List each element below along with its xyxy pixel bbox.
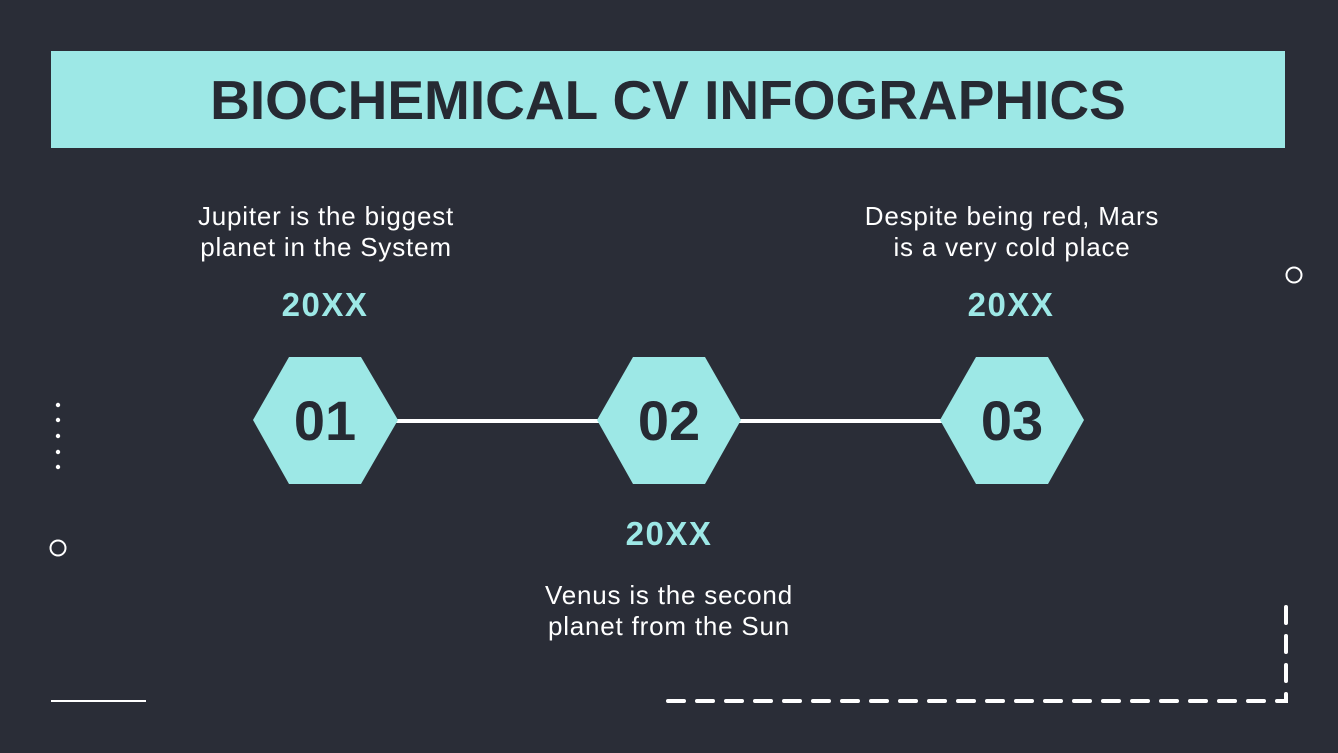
hexagon 01 <box>253 357 398 484</box>
decor: line <box>51 700 146 702</box>
title bar <box>51 51 1285 148</box>
year: step 3: 20XX <box>968 286 1054 323</box>
year: step 1: 20XX <box>282 286 368 323</box>
hexagon 03 <box>940 357 1084 484</box>
decor: circles <box>50 268 1302 556</box>
text: step 2: Venus is the second <box>545 580 793 610</box>
hexagon 02: 02 <box>638 389 700 452</box>
text: step 3: Despite being red, Mars <box>865 201 1159 231</box>
text: step 1: planet in the System <box>200 232 452 262</box>
text: step 1: Jupiter is the biggest <box>198 201 454 231</box>
text: step 3 <box>865 201 1159 262</box>
connector lines <box>396 419 942 423</box>
text: step 1 <box>198 201 454 262</box>
year: step 2: 20XX <box>626 515 712 552</box>
decor: dashed corner <box>668 603 1286 701</box>
hexagon 03: 03 <box>981 389 1043 452</box>
title: BIOCHEMICAL CV INFOGRAPHICS <box>210 68 1126 130</box>
text: step 2: planet from the Sun <box>548 611 790 641</box>
hexagon 01: 01 <box>294 389 356 452</box>
decor: dots <box>56 403 60 469</box>
text: step 2 <box>545 580 793 641</box>
hexagon 02 <box>597 357 741 484</box>
text: step 3: is a very cold place <box>893 232 1131 262</box>
